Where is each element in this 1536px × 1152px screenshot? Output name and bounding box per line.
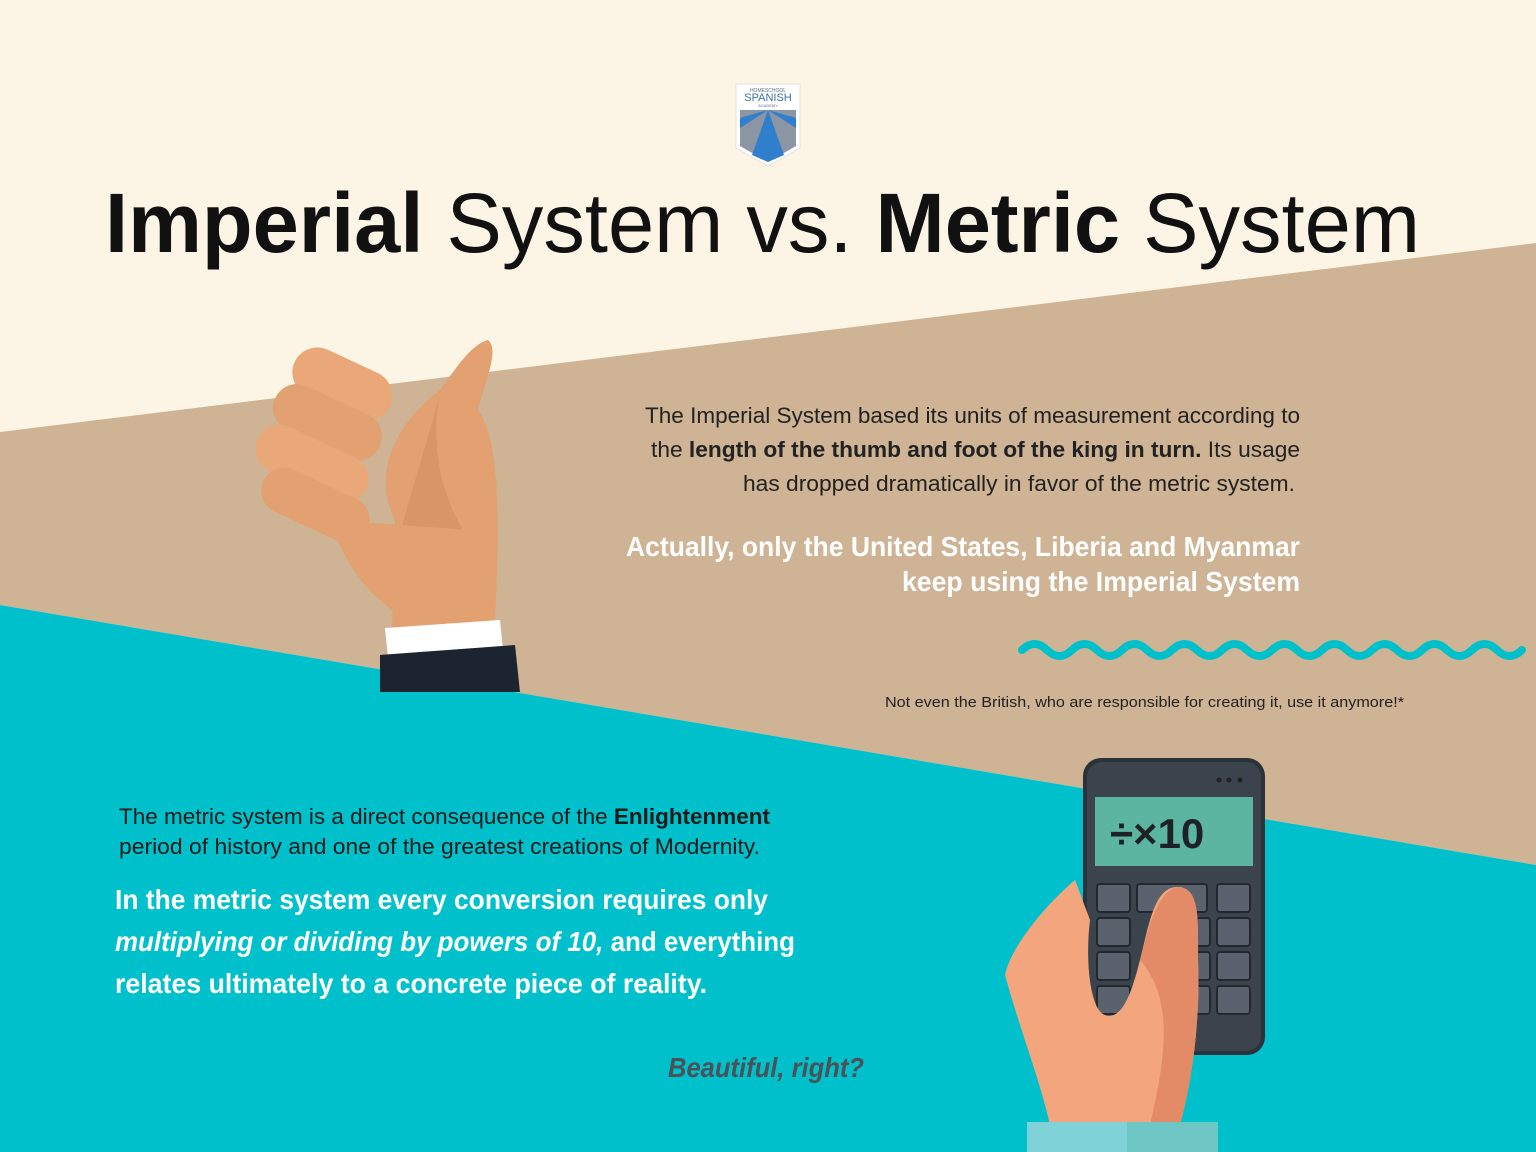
text: beautiful right: Beautiful, right?: [668, 1052, 864, 1083]
panel: teal band: [0, 605, 1536, 1152]
callout: countries: [626, 531, 1300, 597]
text block: metric description: [119, 804, 771, 859]
text block: imperial description: The Imperial System based its units of measurement according to: [645, 403, 1300, 428]
text block: metric description: period of history and one of the greatest creations of Modernity.: [119, 834, 760, 859]
callout: powers of 10: In the metric system every conversion requires only: [115, 884, 768, 915]
icon: calculator with hand: ÷×10: [1110, 810, 1204, 857]
text block: metric description: The metric system is a direct consequence of the Enlightenment: [119, 804, 771, 829]
title: Imperial System vs. Metric System: [105, 176, 1420, 270]
logo: SPANISH: [744, 92, 792, 104]
logo: ACADEMY: [758, 103, 778, 108]
text block: imperial description: the length of the thumb and foot of the king in turn. Its usage: [651, 437, 1300, 462]
logo: HOMESCHOOL: [750, 88, 786, 94]
panel: tan band: [0, 243, 1536, 865]
footnote: Not even the British, who are responsible for creating it, use it anymore!*: [885, 694, 1404, 711]
callout: countries: Actually, only the United States, Liberia and Myanmar: [626, 531, 1300, 562]
callout: powers of 10: multiplying or dividing by powers of 10, and everything: [115, 926, 795, 957]
callout: powers of 10: relates ultimately to a concrete piece of reality.: [115, 968, 707, 999]
text block: imperial description: [645, 403, 1300, 496]
callout: powers of 10: [115, 884, 795, 999]
logo: [736, 84, 800, 166]
text block: imperial description: has dropped dramatically in favor of the metric system.: [743, 471, 1295, 496]
icon: calculator with hand: [1005, 758, 1265, 1152]
icon: thumbs up hand: [247, 339, 520, 692]
wave divider: [1022, 644, 1522, 656]
callout: countries: keep using the Imperial System: [902, 566, 1300, 597]
